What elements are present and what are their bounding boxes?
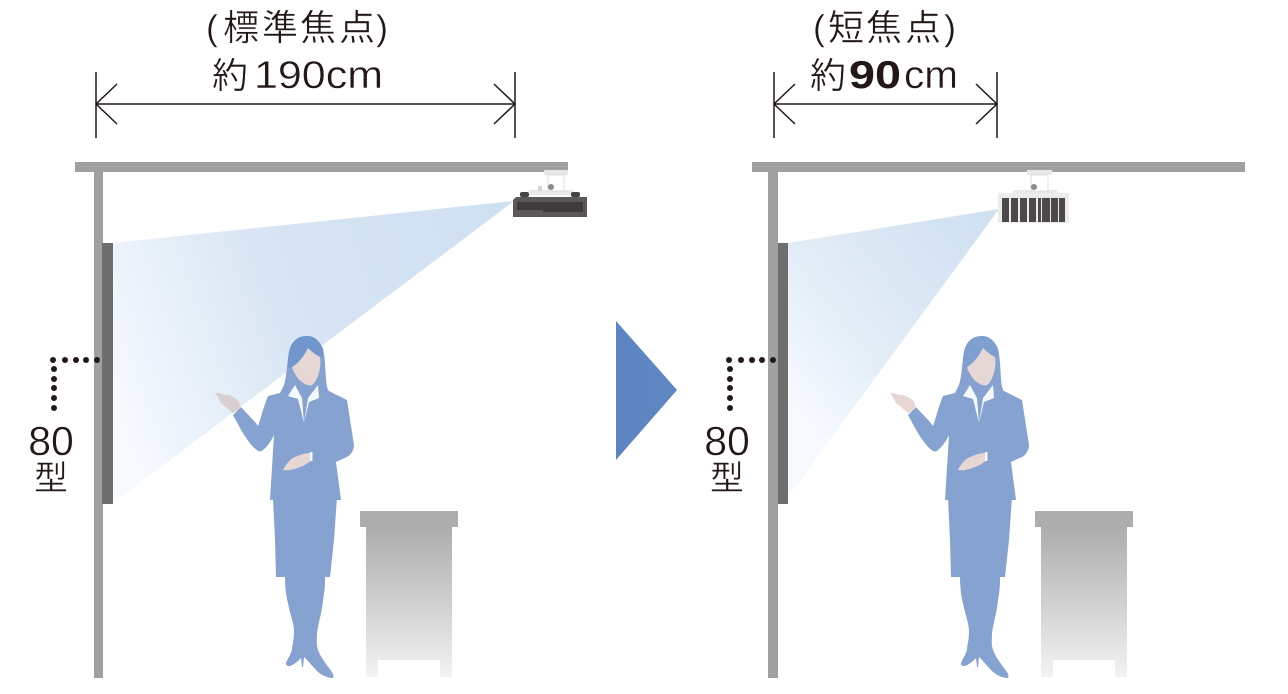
projection beam [788,209,999,497]
panel: short focus [704,7,1245,678]
distance label: about 90cm: 90 [849,54,901,97]
distance label: about 90cm [810,54,958,97]
distance label: about 190cm: 190cm [254,54,383,97]
wall and ceiling [75,162,568,678]
table [1035,511,1133,677]
screen size unit: 型 [34,460,68,498]
distance label: about 190cm [212,54,383,97]
screen size unit: 型 [710,460,744,498]
screen size leader [726,357,776,411]
presenter [890,336,1029,678]
dimension arrow: 190cm [96,72,515,138]
projection beam [113,201,514,503]
presenter [215,336,354,678]
projector: vented body [998,170,1069,223]
screen size label: 80 [704,418,750,464]
distance label: about 90cm: cm [904,54,958,97]
wall and ceiling [752,162,1245,678]
projector: wide body [513,170,587,217]
panel: standard focus [28,7,587,678]
screen [102,243,113,504]
dimension arrow: 90cm [774,72,997,138]
distance label: about 190cm: 約 [212,55,248,96]
screen size label: 80 [28,418,74,464]
table [360,511,458,677]
arrow: transition to short focus [616,321,677,460]
screen [778,243,788,504]
screen size leader [50,357,100,411]
distance label: about 90cm: 約 [810,55,846,96]
heading: standard focus: (標準焦点) [206,7,388,48]
heading: short focus: (短焦点) [813,7,956,48]
